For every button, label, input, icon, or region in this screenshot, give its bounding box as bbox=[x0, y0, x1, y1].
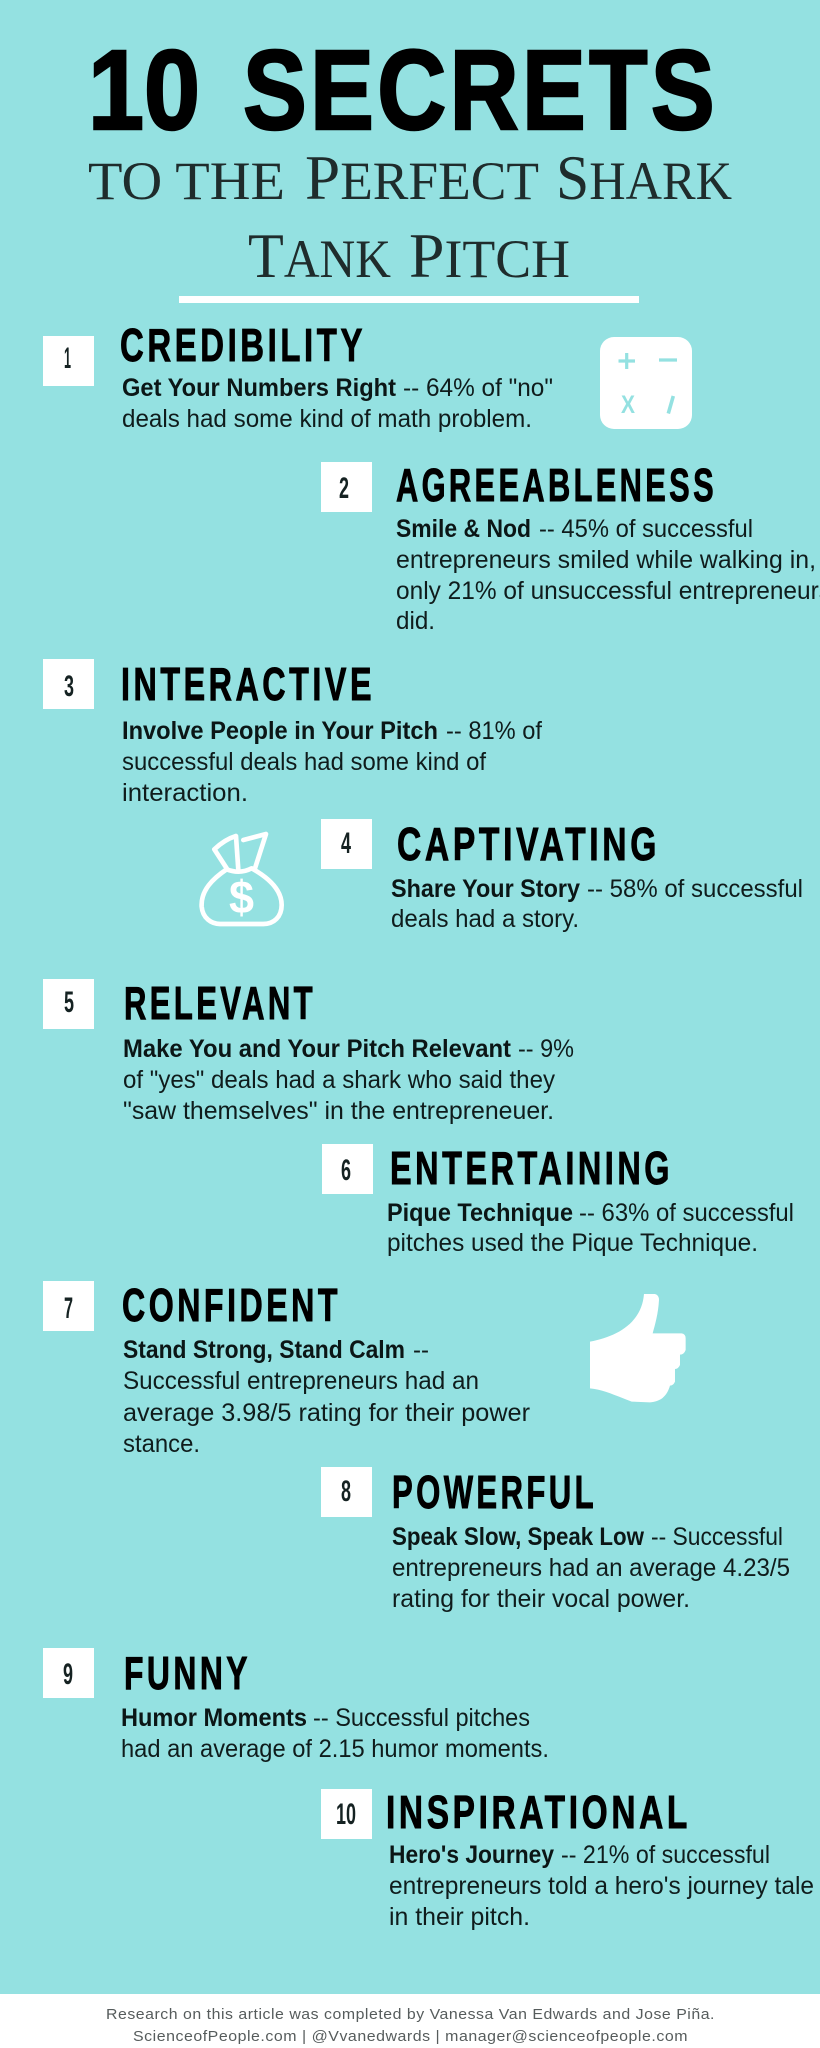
text: relevant: "saw themselves" in the entrepreneuer. bbox=[123, 1097, 554, 1125]
text: confident: Successful entrepreneurs had an bbox=[123, 1367, 479, 1395]
text: confident bbox=[123, 1336, 530, 1458]
number badge 4 bbox=[321, 819, 372, 869]
text: entertaining: -- 63% of successful bbox=[579, 1199, 794, 1227]
text: confident: average 3.98/5 rating for their power bbox=[123, 1399, 530, 1427]
number badge 8 bbox=[321, 1467, 372, 1517]
text: interactive: Involve People in Your Pitch bbox=[122, 717, 438, 745]
icon: calculator bbox=[600, 337, 692, 429]
text: entertaining bbox=[387, 1199, 794, 1257]
number badge 1 bbox=[43, 336, 94, 386]
heading: funny: FUNNY bbox=[124, 1647, 251, 1699]
number badge 3 bbox=[43, 659, 94, 709]
number badge 5 bbox=[43, 979, 94, 1029]
heading: captivating: CAPTIVATING bbox=[397, 818, 660, 870]
number badge 4: 4 bbox=[341, 827, 351, 860]
text: relevant: of "yes" deals had a shark who said they bbox=[123, 1066, 555, 1094]
subtitle bbox=[88, 142, 732, 291]
footer bbox=[0, 1994, 820, 2048]
item 1: credibility bbox=[43, 319, 553, 433]
item 5: relevant bbox=[43, 977, 574, 1125]
text: agreeableness: entrepreneurs smiled while walking in, bbox=[396, 546, 816, 574]
number badge 9: 9 bbox=[63, 1658, 73, 1691]
text: captivating: deals had a story. bbox=[391, 905, 579, 933]
heading: entertaining: ENTERTAINING bbox=[390, 1142, 673, 1194]
text: funny: had an average of 2.15 humor moments. bbox=[121, 1735, 549, 1763]
item 8: powerful bbox=[321, 1466, 790, 1613]
text: inspirational: in their pitch. bbox=[389, 1903, 530, 1931]
text: entertaining: Pique Technique bbox=[387, 1199, 573, 1227]
number badge 10: 10 bbox=[336, 1798, 356, 1831]
text: funny bbox=[121, 1704, 549, 1763]
text: confident: Stand Strong, Stand Calm bbox=[123, 1336, 405, 1364]
title bbox=[88, 27, 718, 153]
icon: thumbs up bbox=[590, 1294, 686, 1402]
text: credibility bbox=[122, 374, 553, 433]
text: captivating: -- 58% of successful bbox=[587, 875, 803, 903]
text: agreeableness bbox=[396, 515, 820, 635]
text: relevant: -- 9% bbox=[518, 1035, 574, 1063]
text: funny: Humor Moments bbox=[121, 1704, 307, 1732]
number badge 6 bbox=[322, 1144, 373, 1194]
number badge 2: 2 bbox=[339, 472, 349, 505]
item 9: funny bbox=[43, 1647, 549, 1763]
icon: money bag: $ bbox=[229, 871, 254, 923]
footer: Research on this article was completed by Vanessa Van Edwards and Jose Piña. bbox=[106, 2006, 715, 2023]
text: inspirational: entrepreneurs told a hero's journey tale bbox=[389, 1872, 814, 1900]
text: powerful: Speak Slow, Speak Low bbox=[392, 1523, 644, 1551]
text: relevant: Make You and Your Pitch Relevant bbox=[123, 1035, 512, 1063]
text: agreeableness: did. bbox=[396, 607, 435, 635]
text: captivating bbox=[391, 875, 803, 933]
text: confident: -- bbox=[413, 1336, 429, 1364]
number badge 2 bbox=[321, 462, 372, 512]
text: credibility: Get Your Numbers Right bbox=[122, 374, 397, 402]
item 6: entertaining bbox=[322, 1142, 794, 1257]
text: inspirational: -- 21% of successful bbox=[561, 1841, 770, 1869]
text: interactive bbox=[122, 717, 542, 807]
number badge 6: 6 bbox=[341, 1154, 351, 1187]
title: 10 bbox=[88, 27, 200, 153]
item 7: confident bbox=[43, 1279, 530, 1458]
text: credibility: -- 64% of "no" bbox=[403, 374, 553, 402]
text: confident: stance. bbox=[123, 1430, 200, 1458]
number badge 1: 1 bbox=[64, 342, 71, 375]
text: powerful: rating for their vocal power. bbox=[392, 1585, 690, 1613]
text: interactive: successful deals had some kind of bbox=[122, 748, 486, 776]
text: inspirational: Hero's Journey bbox=[389, 1841, 554, 1869]
text: relevant bbox=[123, 1035, 574, 1125]
text: interactive: -- 81% of bbox=[446, 717, 542, 745]
title underline bbox=[179, 296, 639, 303]
heading: inspirational: INSPIRATIONAL bbox=[386, 1786, 691, 1838]
heading: confident: CONFIDENT bbox=[122, 1279, 341, 1331]
item 3: interactive bbox=[43, 658, 542, 807]
subtitle: TO THE bbox=[88, 151, 285, 211]
subtitle: PERFECT bbox=[305, 142, 539, 213]
text: captivating: Share Your Story bbox=[391, 875, 580, 903]
heading: powerful: POWERFUL bbox=[392, 1466, 597, 1518]
text: agreeableness: -- 45% of successful bbox=[539, 515, 753, 543]
item 2: agreeableness bbox=[321, 459, 820, 635]
heading: credibility: CREDIBILITY bbox=[120, 319, 366, 371]
footer: ScienceofPeople.com | @Vvanedwards | manager@scienceofpeople.com bbox=[133, 2028, 688, 2045]
text: interactive: interaction. bbox=[122, 779, 248, 807]
icon: calculator: X bbox=[621, 391, 635, 419]
text: agreeableness: Smile & Nod bbox=[396, 515, 531, 543]
heading: interactive: INTERACTIVE bbox=[121, 658, 375, 710]
subtitle: SHARK bbox=[556, 142, 732, 213]
subtitle: TANK bbox=[248, 220, 391, 291]
number badge 7 bbox=[43, 1281, 94, 1331]
subtitle: PITCH bbox=[409, 220, 570, 291]
text: credibility: deals had some kind of math problem. bbox=[122, 405, 532, 433]
text: entertaining: pitches used the Pique Technique. bbox=[387, 1229, 758, 1257]
number badge 10 bbox=[321, 1789, 372, 1839]
text: inspirational bbox=[389, 1841, 814, 1931]
item 10: inspirational bbox=[321, 1786, 814, 1931]
text: powerful: -- Successful bbox=[651, 1523, 783, 1551]
text: powerful bbox=[392, 1523, 790, 1613]
number badge 5: 5 bbox=[64, 986, 74, 1019]
icon: money bag bbox=[202, 834, 282, 924]
number badge 8: 8 bbox=[341, 1475, 351, 1508]
item 4: captivating bbox=[321, 818, 803, 933]
number badge 9 bbox=[43, 1648, 94, 1698]
text: powerful: entrepreneurs had an average 4.23/5 bbox=[392, 1554, 790, 1582]
title: SECRETS bbox=[243, 27, 718, 153]
number badge 3: 3 bbox=[64, 670, 74, 703]
heading: relevant: RELEVANT bbox=[124, 977, 316, 1029]
text: funny: -- Successful pitches bbox=[313, 1704, 530, 1732]
number badge 7: 7 bbox=[64, 1292, 73, 1325]
